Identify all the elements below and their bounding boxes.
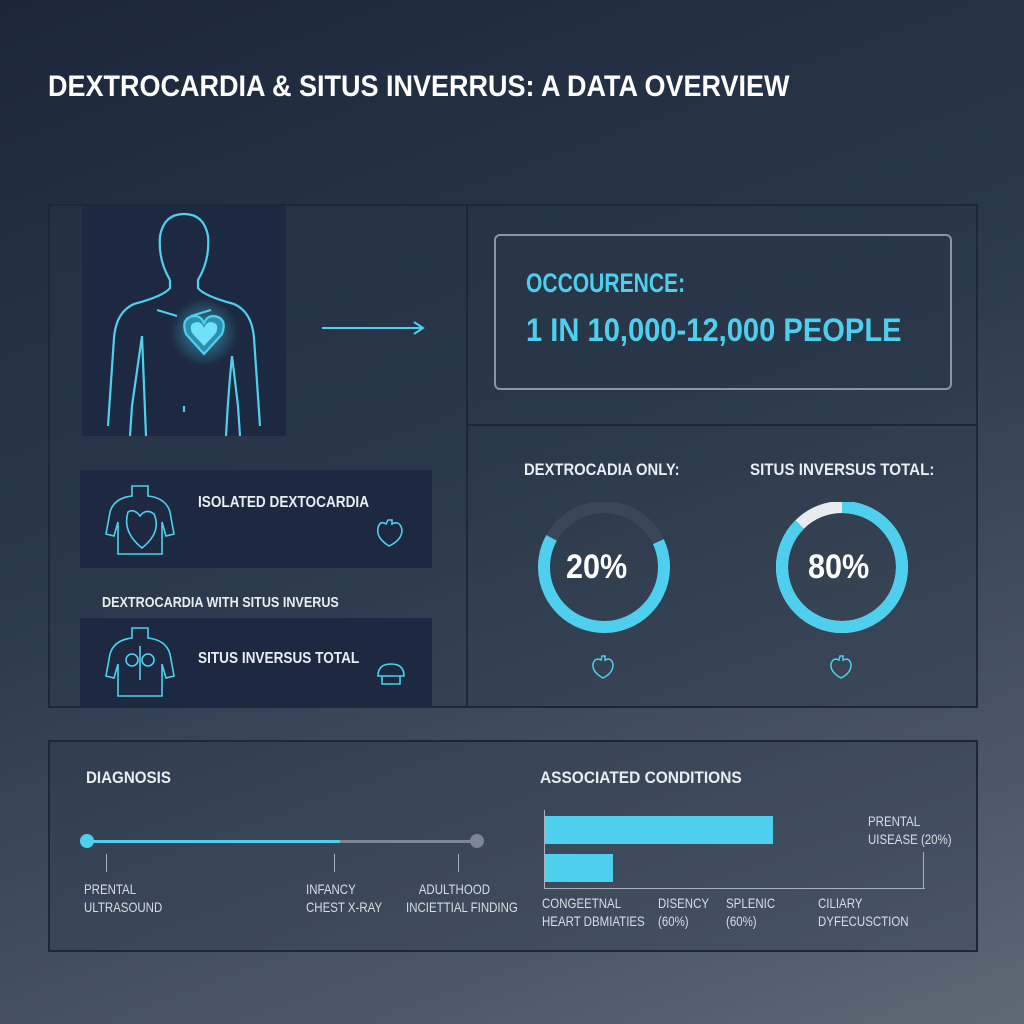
callout: occurrence (494, 234, 952, 390)
panel: bottom: (60%) (658, 913, 689, 929)
panel: bottom: DISENCY (658, 895, 709, 911)
icon: torso heart (105, 485, 175, 555)
timeline (80, 834, 484, 872)
arrow (322, 321, 425, 335)
occurrence value: 1 IN 10,000-12,000 PEOPLE (526, 312, 902, 348)
panel: bottom (48, 740, 978, 952)
label: ISOLATED DEXTOCARDIA (198, 494, 369, 511)
panel: bottom: INCIETTIAL FINDING (406, 899, 518, 915)
bar labels (542, 895, 645, 929)
icon: body with heart (82, 206, 286, 436)
chart: situs inversus total donut: SITUS INVERSUS TOTAL: (750, 460, 934, 479)
bar labels: HEART DBMIATIES (542, 913, 645, 929)
label: SITUS INVERSUS TOTAL (198, 650, 359, 667)
panel: bottom: PRENTAL (868, 813, 920, 829)
icon: heart (376, 519, 403, 547)
timeline labels: ULTRASOUND (84, 899, 162, 915)
chart: dextrocardia only donut: DEXTROCADIA ONLY: (524, 460, 680, 479)
bar labels: CONGEETNAL (542, 895, 621, 911)
panel: bottom: CHEST X-RAY (306, 899, 382, 915)
chart: dextrocardia only donut (524, 460, 680, 679)
heading: associated conditions: ASSOCIATED CONDITIONS (540, 768, 742, 787)
card: isolated dextrocardia (80, 470, 432, 568)
divider horizontal (468, 424, 976, 426)
card: situs inversus total (80, 618, 432, 708)
panel: bottom: UISEASE (20%) (868, 831, 952, 847)
timeline labels: PRENTAL (84, 881, 136, 897)
occurrence label: OCCOURENCE: (526, 268, 685, 298)
panel: main (48, 204, 978, 708)
panel: bottom: INFANCY (306, 881, 356, 897)
divider vertical (466, 206, 468, 706)
subheading: DEXTROCARDIA WITH SITUS INVERUS (102, 594, 339, 611)
title: DEXTROCARDIA & SITUS INVERRUS: A DATA OVERVIEW (48, 70, 790, 103)
icon: torso organs (105, 627, 175, 697)
icon: heart (830, 655, 852, 679)
panel: bottom: SPLENIC (726, 895, 775, 911)
icon: heart (592, 655, 614, 679)
panel: bottom: DYFECUSCTION (818, 913, 909, 929)
icon: device (377, 663, 405, 685)
chart: situs inversus total donut (750, 460, 934, 679)
chart: dextrocardia only donut: 20% (566, 548, 627, 586)
panel: bottom: (60%) (726, 913, 757, 929)
heading: diagnosis: DIAGNOSIS (86, 768, 171, 787)
panel: bottom: CILIARY (818, 895, 862, 911)
panel: bottom: ADULTHOOD (419, 881, 490, 897)
chart: situs inversus total donut: 80% (808, 548, 869, 586)
bar chart (544, 810, 925, 889)
timeline labels (84, 881, 162, 915)
